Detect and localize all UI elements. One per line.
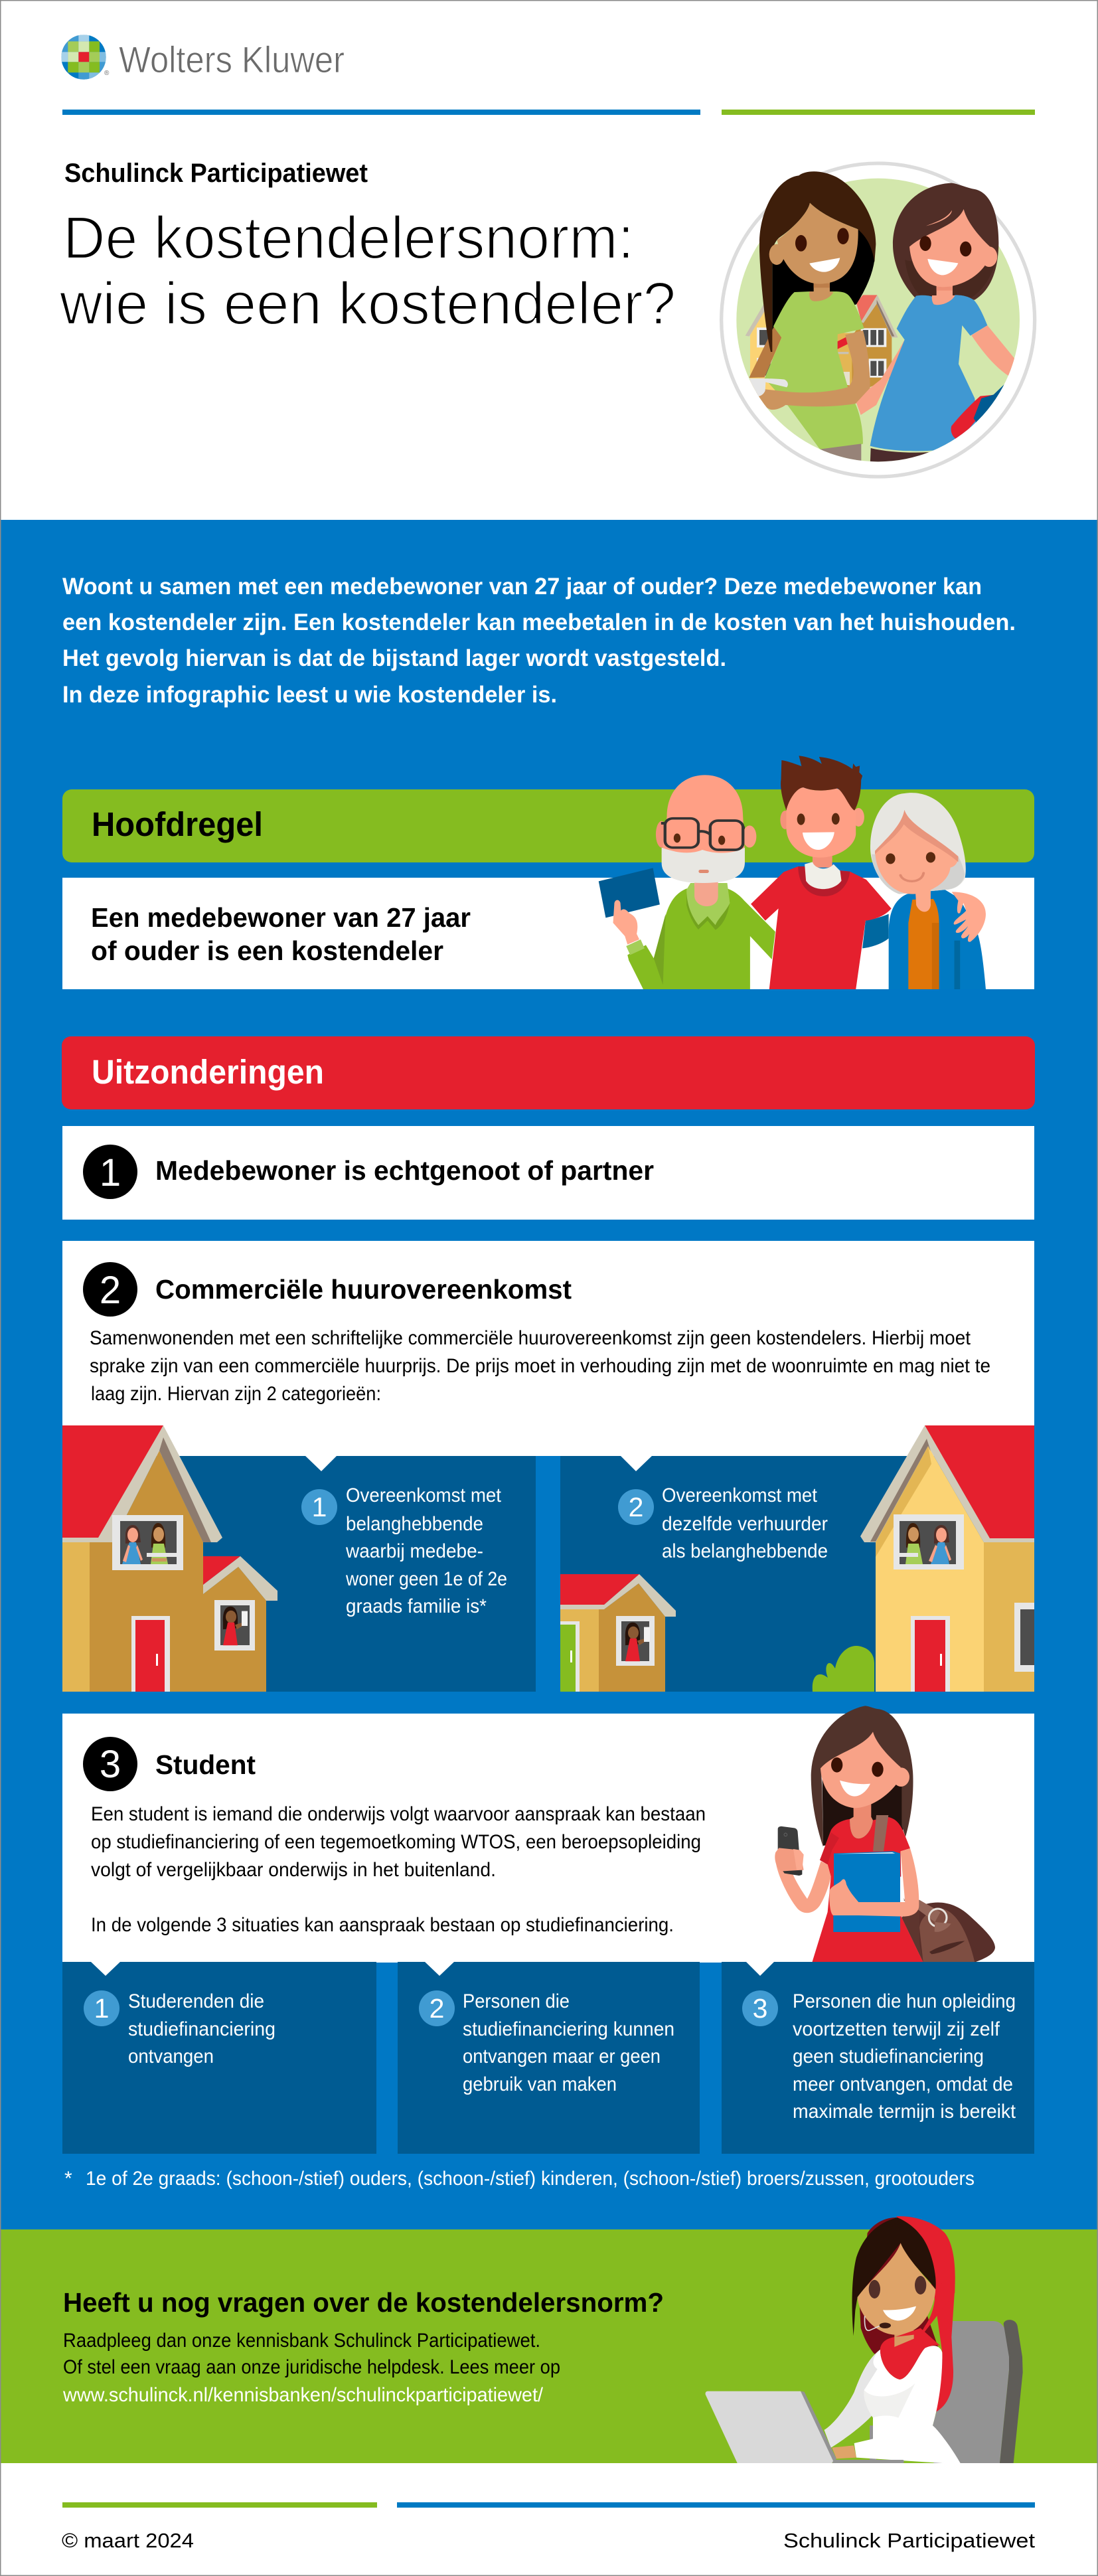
exception 1 heading: Medebewoner is echtgenoot of partner [155, 1155, 654, 1186]
illustration: helpdesk agent with laptop [706, 2216, 1023, 2463]
pointer [305, 1455, 337, 1471]
panel: exception 3 [62, 1714, 1034, 1963]
exception 2 body text: Samenwonenden met een schriftelijke commerciële huurovereenkomst zijn geen kostendelers. Hierbij moet [90, 1327, 971, 1349]
pointer [91, 1962, 120, 1976]
pointer [746, 1962, 774, 1976]
category 1 text: woner geen 1e of 2e [345, 1568, 507, 1590]
situation 3 text [793, 1990, 1016, 2123]
exception 2 body text: sprake zijn van een commerciële huurprijs. De prijs moet in verhouding zijn met de woonruimte en mag niet te [90, 1355, 990, 1377]
exception 3 body text: op studiefinanciering of een tegemoetkoming WTOS, een beroepsopleiding [91, 1831, 701, 1853]
contact text: Of stel een vraag aan onze juridische helpdesk. Lees meer op [63, 2356, 560, 2378]
situation 3 text: meer ontvangen, omdat de [793, 2073, 1013, 2095]
illustration: left houses [62, 1425, 277, 1692]
illustration: bush [813, 1646, 874, 1692]
number badge [419, 1990, 455, 2026]
icon: logo globe [61, 35, 106, 80]
scarf back and hair [860, 2217, 943, 2379]
category 2 text: als belanghebbende [662, 1540, 828, 1562]
contact text: Raadpleeg dan onze kennisbank Schulinck Participatiewet. [63, 2330, 540, 2352]
header rule blue [62, 110, 700, 115]
panel: Hoofdregel heading [62, 789, 1034, 862]
panel: exception 1 [62, 1126, 1034, 1220]
light green disc [736, 179, 1020, 461]
situation 2 text [463, 1990, 674, 2095]
contact text: www.schulinck.nl/kennisbanken/schulinckparticipatiewet/ [62, 2384, 544, 2406]
intro text: Het gevolg hiervan is dat de bijstand lager wordt vastgesteld. [62, 645, 726, 671]
panel: Uitzonderingen heading [62, 1036, 1035, 1109]
pointer [620, 1455, 653, 1471]
title: wie is een kostendeler? [59, 271, 676, 337]
panel: situation 3 [722, 1962, 1034, 2154]
situation 3 text: Personen die hun opleiding [793, 1990, 1016, 2012]
exception 3 heading: Student [155, 1749, 256, 1780]
header rule green [722, 110, 1035, 115]
old woman [870, 793, 986, 989]
situation 1 text: studiefinanciering [128, 2018, 275, 2040]
woman right [856, 183, 1014, 466]
number badge 2: 2 [100, 1269, 121, 1312]
panel: Hoofdregel rule [62, 878, 1034, 989]
exception 2 body text: laag zijn. Hiervan zijn 2 categorieën: [91, 1383, 381, 1405]
contact heading: Heeft u nog vragen over de kostendelersnorm? [63, 2287, 664, 2318]
bag [902, 1897, 995, 1962]
young man [751, 756, 892, 989]
category 1 text [345, 1485, 507, 1617]
panel: situation 2 [398, 1962, 700, 2154]
number badge: 1 [94, 1993, 109, 2024]
panel: situation 1 [62, 1962, 376, 2154]
chair [870, 2320, 1023, 2463]
panel: exception 2 [62, 1241, 1034, 1456]
woman left [749, 171, 876, 466]
illustration: three people [599, 756, 986, 989]
situation 2 text: Personen die [463, 1990, 570, 2012]
situation 3 text: geen studiefinanciering [793, 2046, 984, 2067]
number badge 1 [83, 1145, 137, 1199]
footnote: * [64, 2168, 72, 2190]
number badge [618, 1489, 654, 1525]
exception 3 body text: volgt of vergelijkbaar onderwijs in het buitenland. [91, 1859, 496, 1881]
number badge: 1 [312, 1492, 327, 1522]
blue main section [1, 520, 1097, 2229]
old man [599, 775, 775, 989]
intro text: In deze infographic leest u wie kostendeler is. [62, 682, 557, 708]
situation 2 text: gebruik van maken [463, 2073, 617, 2095]
circle ring [722, 163, 1035, 477]
title: De kostendelersnorm: [63, 205, 634, 272]
exception 2 body text [90, 1327, 990, 1405]
number badge [742, 1990, 778, 2026]
clipped scene: house and bodies [745, 295, 898, 390]
situation 2 text: ontvangen maar er geen [463, 2046, 661, 2067]
number badge 3: 3 [100, 1743, 121, 1786]
book [833, 1851, 904, 1932]
panel: category 1 [62, 1425, 536, 1692]
face [858, 2243, 955, 2347]
exception 2 heading: Commerciële huurovereenkomst [155, 1274, 572, 1305]
number badge 1: 1 [100, 1151, 121, 1194]
body [824, 2328, 961, 2463]
number badge [301, 1489, 337, 1525]
category 1 text: waarbij medebe- [345, 1540, 483, 1562]
category 2 text: dezelfde verhuurder [662, 1513, 828, 1535]
contact text [62, 2330, 560, 2406]
category 1 text: Overeenkomst met [346, 1485, 502, 1506]
number badge: 3 [753, 1993, 767, 2024]
panel: Uitzonderingen heading: Uitzonderingen [92, 1053, 324, 1091]
footer product name: Schulinck Participatiewet [783, 2529, 1035, 2552]
number badge: 2 [430, 1993, 444, 2024]
panel: Hoofdregel rule: of ouder is een kostendeler [91, 935, 443, 966]
footnote: 1e of 2e graads: (schoon-/stief) ouders, (schoon-/stief) kinderen, (schoon-/stief) broers/zussen, grootouders [86, 2168, 975, 2190]
kicker: Schulinck Participatiewet [64, 159, 368, 188]
category 2 text [662, 1485, 828, 1562]
situation 1 text: ontvangen [128, 2046, 214, 2067]
situation 3 text: voortzetten terwijl zij zelf [793, 2018, 1000, 2040]
number badge [84, 1990, 119, 2026]
exception 3 body text [91, 1803, 706, 1936]
panel: Hoofdregel rule: Een medebewoner van 27 jaar [91, 902, 471, 933]
category 1 text: belanghebbende [346, 1513, 483, 1535]
panel: Hoofdregel heading: Hoofdregel [92, 805, 263, 843]
laptop [706, 2391, 904, 2463]
panel: contact call to action [1, 2229, 1097, 2463]
footer rule green [62, 2502, 377, 2508]
logo: Wolters Kluwer [61, 35, 345, 80]
title [59, 205, 676, 337]
illustration: big house right [860, 1425, 1034, 1692]
intro text: een kostendeler zijn. Een kostendeler kan meebetalen in de kosten van het huishouden. [62, 609, 1016, 635]
number badge 2 [83, 1262, 137, 1317]
logo registered mark: ® [104, 70, 110, 77]
number badge: 2 [629, 1492, 643, 1522]
category 2 text: Overeenkomst met [662, 1485, 818, 1506]
footer rule blue [397, 2502, 1035, 2508]
exception 3 body text: In de volgende 3 situaties kan aanspraak bestaan op studiefinanciering. [91, 1914, 674, 1936]
number badge 3 [83, 1737, 137, 1791]
situation 2 text: studiefinanciering kunnen [463, 2018, 674, 2040]
pointer [425, 1962, 454, 1976]
illustration: student with phone, book and bag [775, 1706, 995, 1963]
situation 3 text: maximale termijn is bereikt [793, 2101, 1016, 2123]
category 1 text: graads familie is* [346, 1595, 487, 1617]
intro text [62, 574, 1016, 708]
intro text: Woont u samen met een medebewoner van 27 jaar of ouder? Deze medebewoner kan [62, 574, 982, 600]
logo wordmark: Wolters Kluwer [119, 39, 345, 80]
illustration: two women with house in circle [722, 163, 1035, 477]
situation 1 text: Studerenden die [128, 1990, 264, 2012]
situation 1 text [128, 1990, 275, 2067]
panel: category 2 [560, 1425, 1034, 1692]
exception 3 body text: Een student is iemand die onderwijs volgt waarvoor aanspraak kan bestaan [91, 1803, 706, 1825]
footer date: © maart 2024 [62, 2529, 194, 2552]
arms and phone [775, 1826, 919, 1917]
illustration: small house [560, 1574, 676, 1692]
